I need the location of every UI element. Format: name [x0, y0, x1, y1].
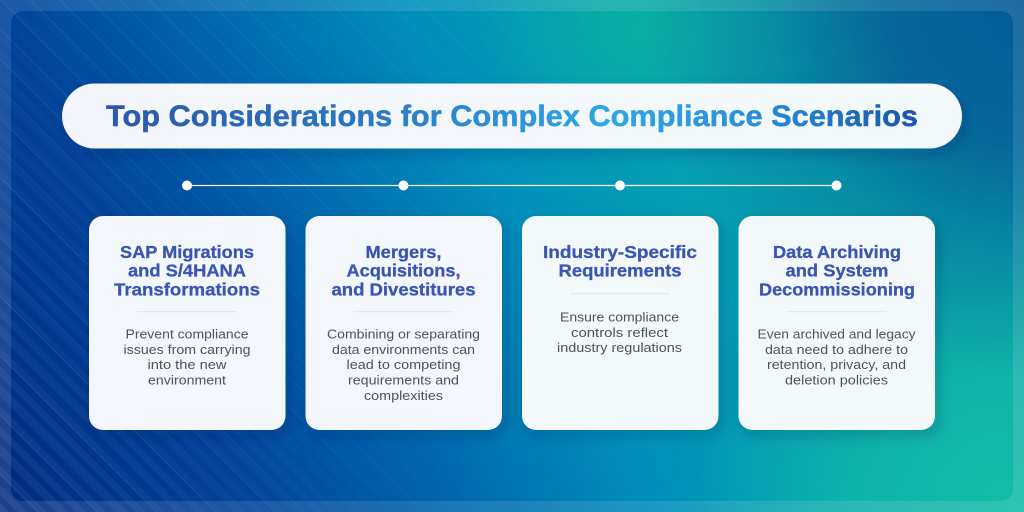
- body: mergers: data environments can: [332, 342, 475, 357]
- body: SAP migrations: [124, 326, 250, 388]
- body: SAP migrations: environment: [148, 372, 226, 388]
- body: data archiving: [758, 326, 916, 388]
- body: mergers: complexities: [364, 388, 443, 403]
- title text: Top Considerations for Complex Compliance Scenarios: [106, 100, 918, 133]
- heading: SAP migrations: and S/4HANA: [128, 260, 246, 280]
- heading: data archiving: Data Archiving: [773, 242, 901, 262]
- heading: industry requirements: Industry-Specific: [543, 242, 697, 262]
- heading: data archiving: and System: [786, 260, 888, 280]
- body: mergers: [327, 326, 480, 403]
- panel: mergers: [306, 216, 502, 430]
- heading: SAP migrations: Transformations: [114, 280, 260, 300]
- timeline connector with four dots: [182, 180, 842, 190]
- body: SAP migrations: issues from carrying: [124, 342, 250, 357]
- heading: data archiving: Decommissioning: [759, 280, 915, 300]
- body: data archiving: data need to adhere to: [765, 342, 908, 357]
- body: SAP migrations: Prevent compliance: [126, 326, 248, 342]
- panel: industry requirements: [522, 216, 718, 430]
- heading: SAP migrations: [114, 242, 260, 300]
- body: industry requirements: controls reflect: [571, 325, 669, 340]
- heading: SAP migrations: SAP Migrations: [120, 242, 254, 262]
- body: data archiving: retention, privacy, and: [767, 357, 906, 372]
- body: SAP migrations: into the new: [148, 357, 227, 372]
- panel: data archiving: [738, 216, 935, 430]
- heading: industry requirements: Requirements: [558, 260, 682, 280]
- body: industry requirements: industry regulations: [557, 340, 682, 355]
- body: industry requirements: Ensure compliance: [560, 310, 679, 324]
- body: data archiving: Even archived and legacy: [758, 326, 916, 342]
- heading: mergers: [332, 242, 476, 300]
- body: mergers: lead to competing: [346, 357, 460, 372]
- title pill: [62, 84, 962, 148]
- body: industry requirements: [557, 310, 682, 355]
- body: mergers: requirements and: [348, 372, 459, 388]
- heading: industry requirements: [543, 242, 697, 280]
- body: mergers: Combining or separating: [327, 326, 480, 342]
- heading: mergers: Mergers,: [366, 242, 442, 262]
- panel: SAP migrations: [89, 216, 286, 430]
- heading: mergers: Acquisitions,: [346, 260, 460, 280]
- heading: data archiving: [759, 242, 915, 300]
- body: data archiving: deletion policies: [785, 372, 888, 388]
- heading: mergers: and Divestitures: [332, 280, 476, 300]
